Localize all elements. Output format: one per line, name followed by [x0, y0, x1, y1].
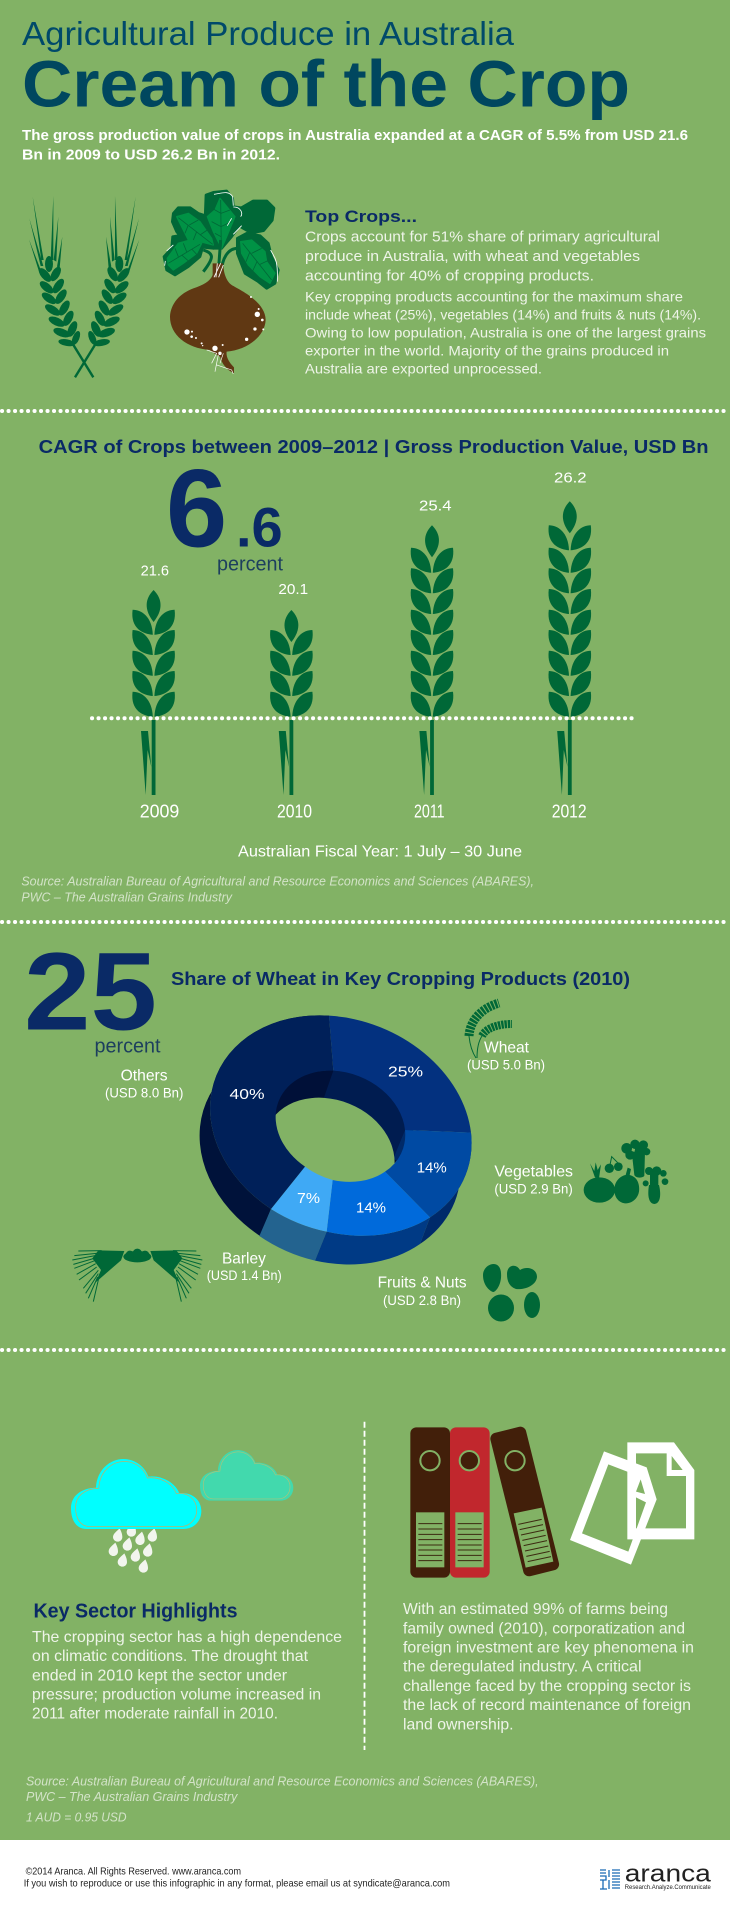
- text block: family owned farms: the deregulated industry. A critical: [403, 1658, 642, 1676]
- heading: Key Sector Highlights: Key Sector Highlights: [34, 1600, 238, 1622]
- icon: vegetables: [584, 1140, 668, 1204]
- donut percentages: 40%: [230, 1086, 264, 1103]
- copyright text: If you wish to reproduce or use this infographic in any format, please email us at syndicate@aranca.com: [24, 1877, 450, 1889]
- value labels: 21.6: [141, 563, 169, 580]
- text block: key sector highlights: [32, 1629, 342, 1722]
- intro text: The gross production value of crops in Australia expanded at a CAGR of 5.5% from USD 21.6: [22, 127, 688, 144]
- label: Wheat: Wheat: [484, 1039, 530, 1056]
- logo: aranca: Research.Analyze.Communicate: [625, 1885, 711, 1891]
- intro text: [22, 127, 688, 164]
- text block: top crops second paragraph: [305, 289, 706, 377]
- text block: key sector highlights: ended in 2010 kept the sector under: [32, 1667, 288, 1684]
- source note: chart: [21, 874, 534, 905]
- text block: family owned farms: the lack of record maintenance of foreign: [403, 1697, 691, 1714]
- icon: rain clouds: [71, 1450, 293, 1573]
- icon: small wheat: [469, 1003, 512, 1058]
- text block: top crops second paragraph: Key cropping products accounting for the maximum share: [305, 289, 683, 305]
- heading: share of wheat: Share of Wheat in Key Cropping Products (2010): [171, 969, 630, 989]
- value labels: 26.2: [554, 469, 587, 486]
- icon: barley: [72, 1249, 202, 1302]
- callout: 6.6 percent: 6: [166, 448, 227, 571]
- donut percentages: 7%: [297, 1190, 320, 1207]
- year labels: 2012: [552, 802, 587, 822]
- large cloud: [71, 1459, 201, 1529]
- binder: red middle: [450, 1427, 490, 1578]
- text block: top crops first paragraph: accounting for 40% of cropping products.: [305, 267, 594, 284]
- text block: top crops second paragraph: Owing to low population, Australia is one of the largest grains: [305, 325, 706, 341]
- stalk: 2009: [132, 590, 175, 795]
- value labels: 25.4: [419, 498, 452, 515]
- year labels: [140, 802, 587, 822]
- label: Barley: Barley: [222, 1250, 266, 1267]
- stalk: 2011: [411, 525, 453, 795]
- chart: 3D donut: [200, 1015, 472, 1264]
- value labels: [141, 469, 587, 598]
- source note: footer: 1 AUD = 0.95 USD: [26, 1809, 127, 1824]
- year labels: 2011: [414, 802, 445, 822]
- callout: 25 percent: 25: [24, 930, 157, 1053]
- text block: key sector highlights: pressure; production volume increased in: [32, 1686, 321, 1703]
- title: subtitle line: Agricultural Produce in Australia: [22, 15, 515, 52]
- label: Barley: [207, 1250, 282, 1283]
- label: Wheat: (USD 5.0 Bn): [467, 1057, 545, 1072]
- source note: footer: Source: Australian Bureau of Agricultural and Resource Economics and Sciences (ABARES),: [26, 1774, 539, 1789]
- text block: family owned farms: family owned (2010), corporatization and: [403, 1620, 685, 1637]
- donut percentages: 14%: [356, 1200, 386, 1217]
- donut percentages: [230, 1064, 447, 1217]
- label: Fruits and Nuts: (USD 2.8 Bn): [383, 1293, 461, 1308]
- heading: CAGR chart: CAGR of Crops between 2009–2012 | Gross Production Value, USD Bn: [39, 436, 709, 457]
- heading: Top Crops: Top Crops...: [305, 207, 417, 226]
- text block: family owned farms: [403, 1601, 694, 1733]
- callout: 6.6 percent: .6: [236, 496, 283, 559]
- callout: 6.6 percent: [166, 448, 283, 576]
- text block: top crops first paragraph: Crops account for 51% share of primary agricultural: [305, 229, 660, 246]
- logo: aranca: aranca: [625, 1860, 712, 1887]
- stalk: 2012: [548, 501, 591, 795]
- source note: chart: Source: Australian Bureau of Agricultural and Resource Economics and Sciences (ABARES),: [21, 874, 534, 889]
- text block: top crops second paragraph: include wheat (25%), vegetables (14%) and fruits & nuts (14%).: [305, 307, 701, 323]
- text block: key sector highlights: The cropping sector has a high dependence: [32, 1629, 342, 1646]
- stalk: 2010: [270, 610, 313, 795]
- binder: brown leaning: [489, 1425, 560, 1578]
- callout: 25 percent: percent: [94, 1036, 161, 1058]
- logo: aranca: [600, 1860, 712, 1891]
- binder: brown left: [410, 1427, 450, 1578]
- value labels: 20.1: [278, 581, 308, 598]
- callout: 6.6 percent: percent: [217, 554, 283, 576]
- label: Others: [105, 1068, 183, 1101]
- icon: crossed wheat ears: [29, 196, 139, 378]
- source note: footer: PWC – The Australian Grains Industry: [26, 1789, 239, 1804]
- text block: family owned farms: foreign investment are key phenomena in: [403, 1639, 694, 1656]
- text block: key sector highlights: on climatic conditions. The drought that: [32, 1648, 309, 1665]
- rain drops: [109, 1523, 157, 1573]
- text block: top crops first paragraph: [305, 229, 660, 284]
- icon: binders: [410, 1425, 560, 1578]
- title: main heading: Cream of the Crop: [22, 46, 630, 120]
- label: Others: (USD 8.0 Bn): [105, 1086, 183, 1101]
- note: fiscal year: Australian Fiscal Year: 1 July – 30 June: [238, 844, 522, 861]
- small cloud: [200, 1450, 293, 1501]
- text block: family owned farms: land ownership.: [403, 1716, 514, 1733]
- text block: top crops second paragraph: exporter in the world. Majority of the grains produced in: [305, 343, 669, 359]
- label: Vegetables: [494, 1164, 573, 1196]
- donut percentages: 25%: [388, 1064, 423, 1081]
- year labels: 2009: [140, 802, 179, 822]
- label: Wheat: [467, 1039, 545, 1072]
- copyright text: ©2014 Aranca. All Rights Reserved. www.aranca.com: [26, 1865, 241, 1877]
- text block: top crops first paragraph: produce in Australia, with wheat and vegetables: [305, 248, 640, 265]
- source note: footer: [26, 1774, 539, 1824]
- year labels: 2010: [277, 802, 312, 822]
- footer panel: [0, 1840, 730, 1913]
- source note: chart: PWC – The Australian Grains Industry: [21, 890, 233, 905]
- label: Vegetables: (USD 2.9 Bn): [494, 1181, 573, 1196]
- icon: documents: [570, 1442, 694, 1565]
- intro text: Bn in 2009 to USD 26.2 Bn in 2012.: [22, 146, 280, 164]
- copyright text: [24, 1865, 450, 1889]
- text block: key sector highlights: 2011 after moderate rainfall in 2010.: [32, 1705, 278, 1722]
- text block: family owned farms: With an estimated 99% of farms being: [403, 1601, 668, 1618]
- label: Vegetables: Vegetables: [494, 1164, 573, 1181]
- icon: beet root with leaves: [164, 191, 278, 374]
- text block: family owned farms: challenge faced by the cropping sector is: [403, 1678, 691, 1695]
- label: Fruits and Nuts: [378, 1275, 467, 1308]
- chart: wheat stalks by year: [92, 469, 634, 822]
- label: Barley: (USD 1.4 Bn): [207, 1268, 282, 1283]
- text block: top crops second paragraph: Australia are exported unprocessed.: [305, 361, 542, 377]
- label: Fruits and Nuts: Fruits & Nuts: [378, 1275, 467, 1292]
- donut percentages: 14%: [417, 1159, 447, 1176]
- icon: fruits and nuts: [483, 1264, 540, 1322]
- label: Others: Others: [121, 1068, 168, 1085]
